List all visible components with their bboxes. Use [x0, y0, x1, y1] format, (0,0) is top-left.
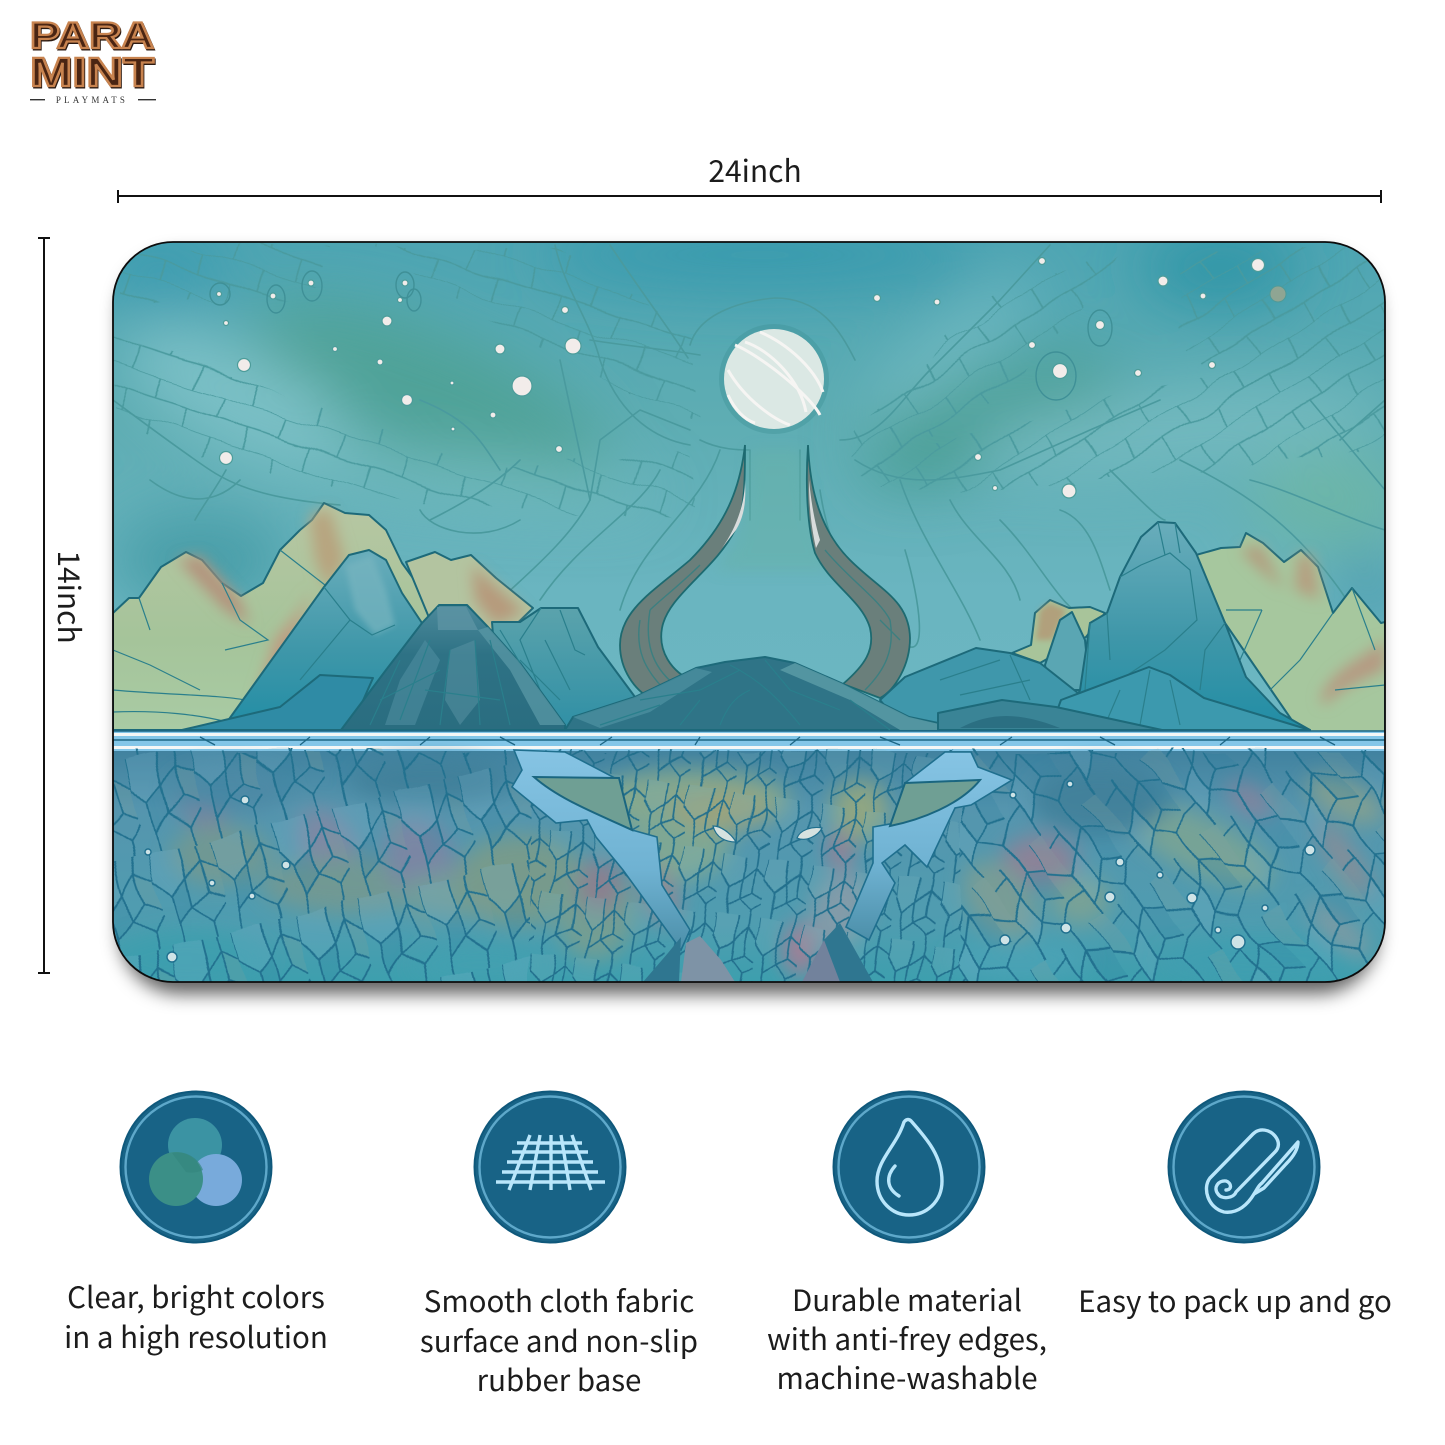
- caption: rubber base: [477, 1358, 641, 1400]
- mountains: small teal peak: [1045, 612, 1090, 690]
- mountains: right ridge: [880, 648, 1310, 730]
- horn: right: [807, 445, 910, 698]
- lower legs: [643, 923, 873, 982]
- caption: Easy to pack up and go: [1078, 1279, 1392, 1321]
- underwater lead lines: left: [100, 751, 530, 1000]
- sky cracked bands: [113, 245, 1385, 520]
- playmat artwork: [90, 221, 1410, 1000]
- logo tagline: PLAYMATS: [56, 95, 128, 105]
- feature: cloth fabric: [420, 1092, 698, 1400]
- caption: in a high resolution: [64, 1315, 328, 1357]
- mountains: far right green range: [1196, 533, 1385, 732]
- stars: [216, 258, 1264, 498]
- sky crack lines: [113, 245, 1385, 650]
- underwater lead lines: right: [960, 751, 1400, 1000]
- logo word: MINT: MINT: [30, 49, 154, 95]
- moon: [719, 324, 829, 434]
- mountains: dark left peak: [341, 605, 565, 730]
- underwater lead lines: centre: [530, 751, 960, 1000]
- mountains: small tan peak: [1012, 600, 1105, 663]
- logo: Paramint Playmats: [30, 15, 156, 105]
- horn: left: [620, 445, 745, 698]
- vase column: [728, 458, 820, 567]
- mountains: low foreground ridge: [938, 700, 1162, 730]
- mountains: left teal peak: [227, 550, 422, 730]
- caption: surface and non-slip: [420, 1319, 698, 1361]
- mountains: big right peak: [1060, 522, 1310, 730]
- caption: Clear, bright colors: [67, 1275, 325, 1317]
- logo word: MINT: MINT: [31, 50, 155, 96]
- caption: Durable material: [792, 1278, 1022, 1320]
- mountains: far left tan range: [113, 503, 533, 730]
- icon: overlapping colour circles: [120, 1092, 272, 1242]
- feature: durable material: [767, 1092, 1047, 1398]
- width dimension: 24inch: 24inch: [708, 147, 802, 191]
- star halos: [210, 271, 1112, 400]
- logo word: PARA: PARA: [31, 16, 155, 58]
- icon: water drop: [834, 1092, 984, 1242]
- eyes: [713, 826, 822, 842]
- feature: bright colours: [64, 1092, 328, 1357]
- tan planet: [1270, 286, 1286, 302]
- shoreline band: [113, 731, 1385, 752]
- light blue left limb: [512, 750, 690, 950]
- sky background: [114, 242, 1384, 716]
- right ear wedge: [890, 780, 980, 826]
- left ear wedge: [534, 777, 632, 830]
- mountains: right of dark peak: [492, 608, 635, 730]
- icon: fabric grid: [474, 1092, 626, 1242]
- width dimension: 24inch: [118, 147, 1381, 203]
- icon: rolled mat: [1168, 1092, 1320, 1242]
- playmat border: [113, 242, 1385, 982]
- logo word: PARA: PARA: [30, 15, 154, 56]
- underwater stained glass: [100, 751, 1400, 1000]
- height dimension: 14inch: 14inch: [49, 550, 93, 644]
- height dimension: 14inch: [38, 238, 93, 973]
- mountains: central dark ridge: [565, 657, 972, 730]
- light blue right limb: [846, 752, 1012, 940]
- underwater colour patches: [110, 758, 1391, 990]
- caption: Smooth cloth fabric: [424, 1279, 694, 1321]
- playmat shadow: [120, 254, 1378, 994]
- feature: portable: [1078, 1092, 1392, 1321]
- mountains: low left ridge: [182, 675, 373, 730]
- caption: machine-washable: [776, 1356, 1038, 1398]
- caption: with anti-frey edges,: [767, 1317, 1047, 1359]
- bubbles: [145, 781, 1315, 962]
